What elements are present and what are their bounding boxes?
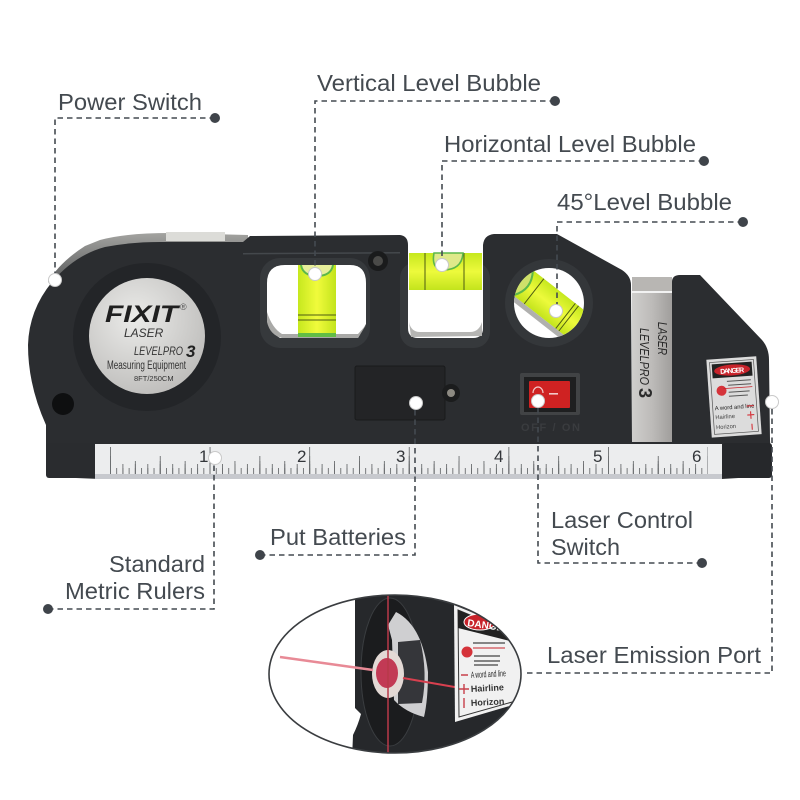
label: 45 degree level bubble (550, 189, 748, 318)
label: standard metric rulers: Standard (109, 551, 205, 577)
label disc: FIXIT: ® (180, 302, 187, 312)
label: laser emission port: Laser Emission Port (547, 642, 761, 668)
inset chrome (388, 612, 428, 717)
label: horizontal level bubble: Horizontal Level Bubble (444, 131, 696, 157)
band text: LASER (655, 322, 670, 355)
band text: 3 (635, 388, 655, 398)
vertical level window (260, 258, 370, 348)
inset danger sticker (454, 605, 520, 722)
label: put batteries: Put Batteries (270, 524, 406, 550)
label: vertical level bubble (308, 70, 560, 280)
inset body (352, 596, 510, 752)
inset lens (372, 650, 404, 698)
inset danger sticker: A word and line (471, 668, 506, 680)
chrome band (632, 277, 672, 442)
top chrome strip of tape housing (48, 233, 248, 292)
label: horizontal level bubble (436, 131, 709, 272)
label: vertical level bubble: Vertical Level Bubble (317, 70, 541, 96)
black base right (722, 443, 772, 478)
ruler numbers: 4 (494, 447, 503, 466)
laser level device (28, 232, 772, 479)
ruler numbers: 1 (199, 447, 208, 466)
danger sticker: Horizon (716, 424, 736, 431)
danger sticker: DANGER (720, 367, 744, 376)
label: standard metric rulers (43, 452, 222, 614)
inset danger sticker: DANGER (467, 618, 512, 635)
battery cover (355, 366, 460, 420)
laser switch (520, 373, 580, 434)
label: laser control switch: Switch (551, 534, 620, 560)
laser switch: OFF / ON (521, 422, 580, 434)
danger sticker (706, 356, 762, 438)
ruler numbers: 2 (297, 447, 306, 466)
ruler numbers (199, 447, 701, 466)
label disc: FIXIT: 3 (186, 342, 196, 361)
label: laser emission port (527, 396, 778, 673)
label: laser control switch: Laser Control (551, 507, 693, 533)
metric ruler (95, 444, 722, 479)
ruler numbers: 5 (593, 447, 602, 466)
label disc: FIXIT: FIXIT (105, 301, 181, 328)
ruler numbers: 6 (692, 447, 701, 466)
ruler numbers: 3 (396, 447, 405, 466)
label: laser control switch (532, 394, 707, 568)
upper body highlight (243, 252, 400, 254)
label disc: FIXIT: Measuring Equipment (107, 360, 187, 372)
label: put batteries (255, 396, 422, 560)
hole (52, 393, 74, 415)
inset danger sticker: Hairline (471, 682, 504, 694)
label disc: FIXIT (73, 263, 221, 411)
label disc: FIXIT: LEVELPRO (134, 344, 183, 358)
screw (368, 251, 388, 271)
label disc: FIXIT: LASER (124, 326, 164, 340)
label: 45 degree level bubble: 45°Level Bubble (557, 189, 732, 215)
45 degree level window (505, 259, 593, 347)
band text (635, 322, 670, 398)
inset danger sticker: Horizon (471, 696, 505, 708)
label: power switch: Power Switch (58, 89, 202, 115)
danger sticker: Hairline (715, 414, 735, 421)
label: power switch (48, 89, 220, 286)
device body (28, 234, 772, 479)
horizontal level vial (400, 253, 490, 348)
sticker on top edge (166, 232, 225, 241)
inset: laser port close-up (269, 590, 530, 760)
danger sticker: A word and line (715, 404, 755, 412)
band text: LEVELPRO (637, 328, 652, 385)
label: standard metric rulers: Metric Rulers (65, 578, 205, 604)
inset laser lines (280, 657, 373, 670)
label disc: FIXIT: 8FT/250CM (134, 374, 174, 383)
black base left (46, 443, 96, 478)
